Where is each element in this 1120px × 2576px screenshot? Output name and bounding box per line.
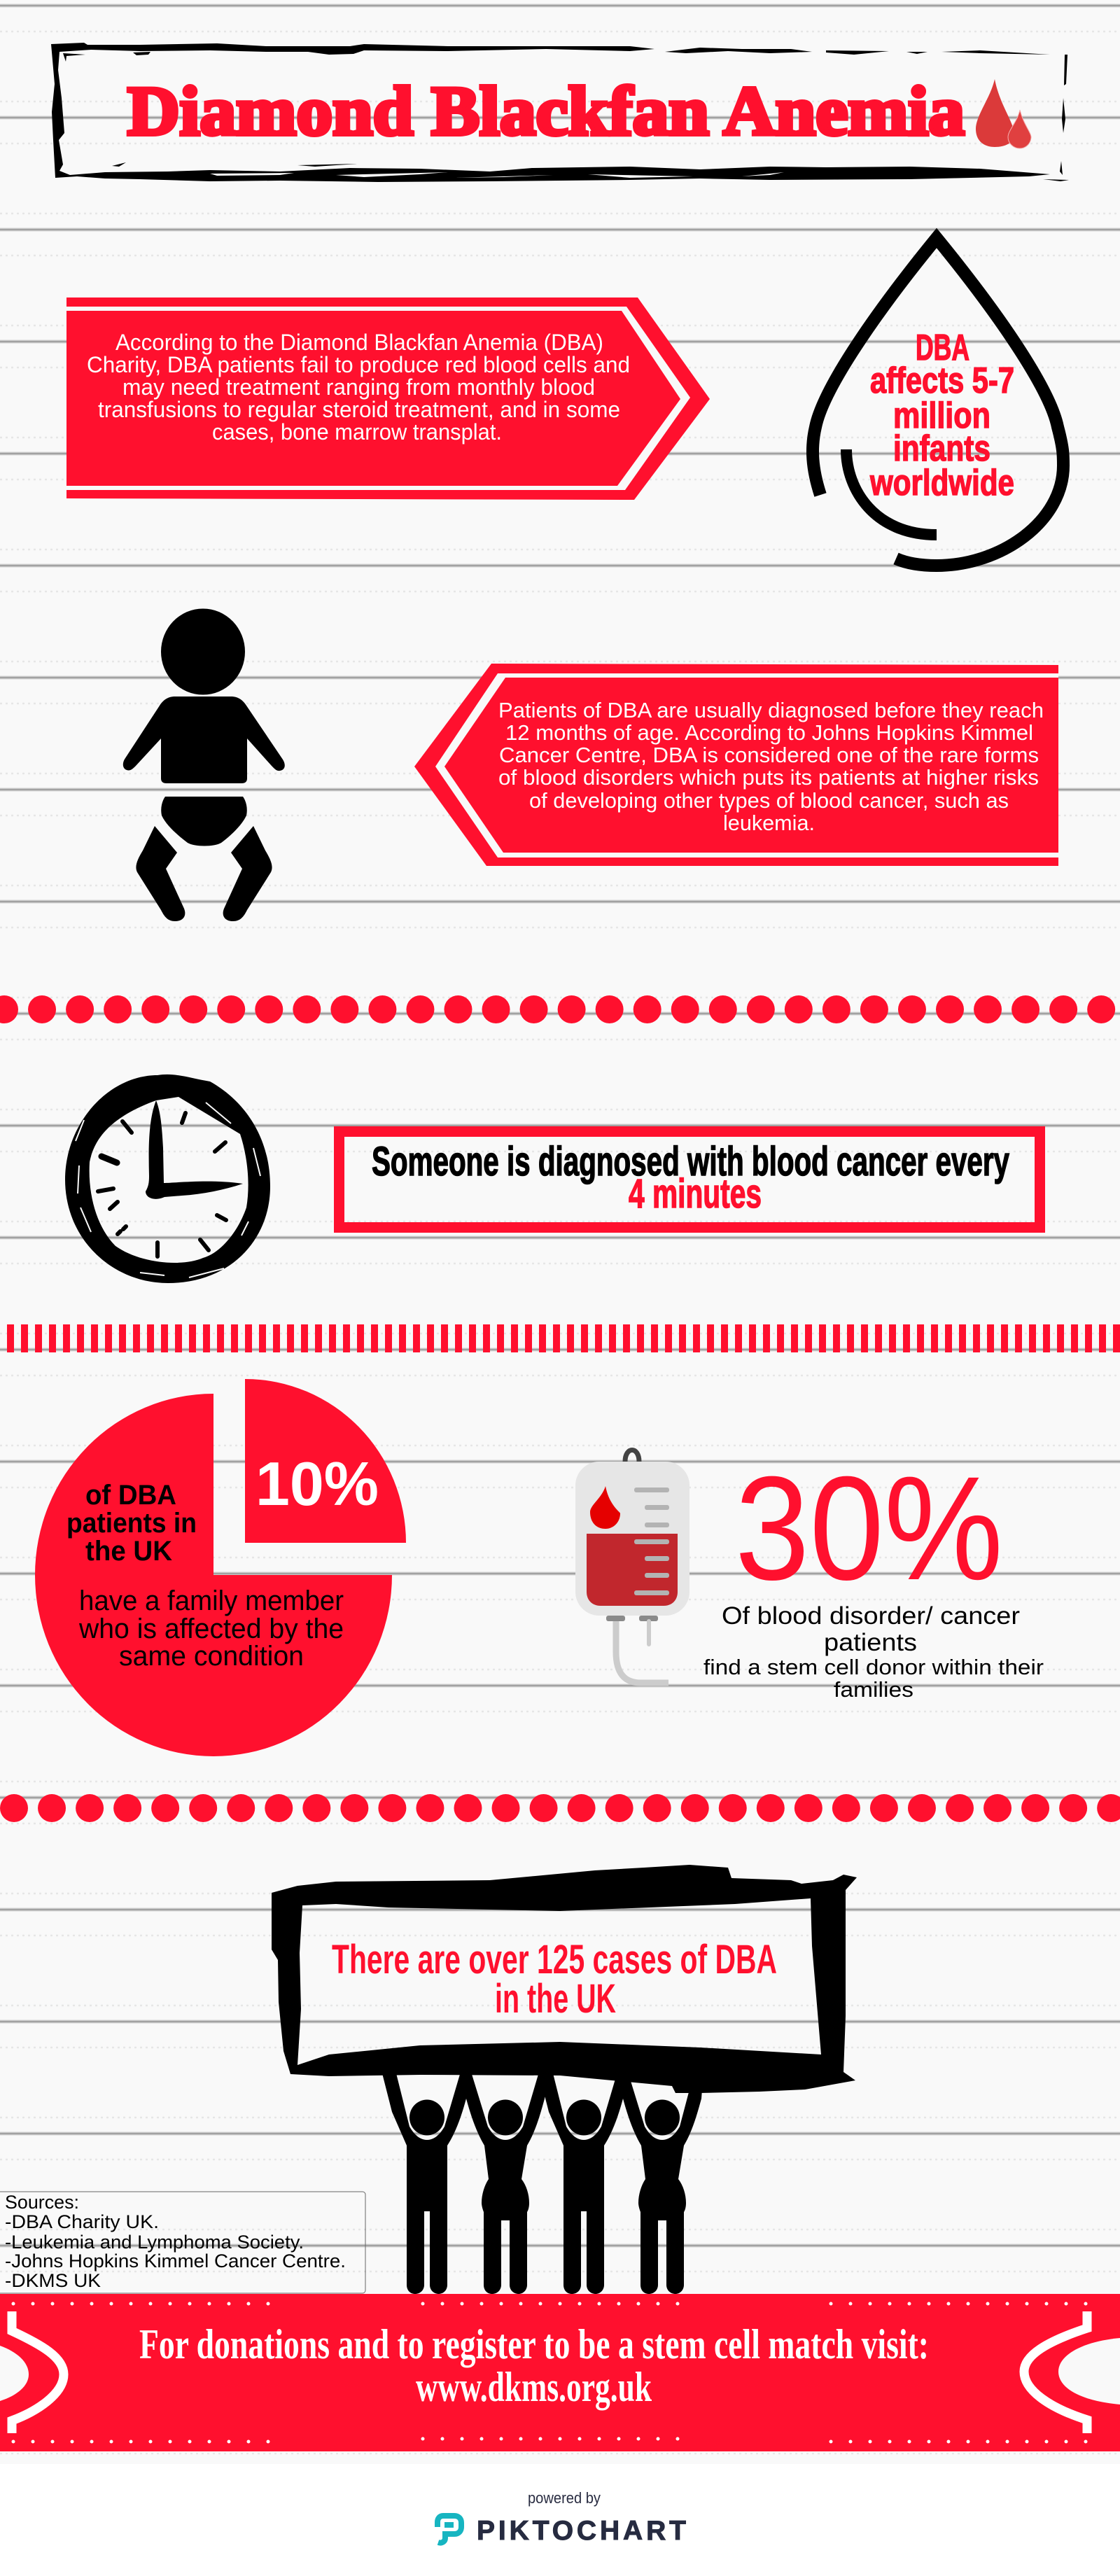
panel: diagnosis frequency: [339, 1131, 1040, 1228]
text: stem cell donor: families: [834, 1677, 913, 1702]
panel: sources: Sources:: [5, 2192, 79, 2213]
people silhouettes: [382, 2072, 702, 2294]
footer: piktochart wordmark: PIKTOCHART: [477, 2516, 686, 2546]
label: of DBA patients in the UK: [66, 1480, 197, 1567]
chart: 10% pie: [35, 1379, 406, 1756]
panel: drop statistic: [813, 238, 1063, 566]
diagnosis text: leukemia.: [723, 811, 815, 835]
intro text: Charity, DBA patients fail to produce red blood cells and: [87, 352, 630, 377]
divider: red dots: [14, 1794, 1120, 1822]
text: stem cell donor: Of blood disorder/ cancer: [722, 1602, 1020, 1630]
title text: Diamond Blackfan Anemia: [127, 72, 965, 150]
drop text: million: [893, 396, 990, 436]
text: stem cell donor: patients: [824, 1629, 917, 1656]
diagnosis text: of blood disorders which puts its patients at higher risks: [498, 765, 1039, 790]
panel: intro arrow: [66, 298, 710, 500]
frequency text: 4 minutes: [629, 1171, 762, 1217]
sign text: in the UK: [495, 1976, 616, 2022]
brush frame: [272, 1865, 857, 2093]
intro text: transfusions to regular steroid treatment, and in some: [98, 397, 620, 422]
banner stars: [13, 2304, 1089, 2442]
intro text: According to the Diamond Blackfan Anemia (DBA): [115, 330, 603, 355]
drop text: worldwide: [869, 463, 1014, 503]
panel: diagnosis arrow: [414, 664, 1058, 866]
illustration: people lifting sign: [272, 1865, 857, 2294]
stat: 30%: 30%: [735, 1446, 1003, 1611]
icon: piktochart logo: [438, 2516, 461, 2543]
sign text: There are over 125 cases of DBA: [332, 1937, 777, 1982]
divider: red dots: [4, 995, 1120, 1023]
panel: sources: -DBA Charity UK.: [5, 2211, 159, 2232]
icon: clock: [65, 1074, 270, 1283]
box border: [339, 1131, 1040, 1228]
drop text: infants: [893, 428, 990, 469]
drop text: [869, 328, 1014, 503]
icon: blood drops: [976, 79, 1031, 148]
label: 10%: 10%: [255, 1449, 379, 1518]
pie: 10% sector: [245, 1379, 406, 1543]
diagnosis text: Patients of DBA are usually diagnosed before they reach: [498, 698, 1044, 722]
intro text: [87, 330, 630, 444]
arrow shape: [66, 298, 710, 500]
panel: sources: -Leukemia and Lymphoma Society.: [5, 2232, 304, 2253]
pie: main sector: [35, 1394, 392, 1756]
icon: blood bag: [575, 1450, 690, 1683]
panel: sources: -Johns Hopkins Kimmel Cancer Centre.: [5, 2250, 346, 2272]
label: family member: [78, 1586, 344, 1672]
label: family member: who is affected by the: [78, 1614, 344, 1644]
divider: red stripes: [0, 1324, 1120, 1352]
diagnosis text: Cancer Centre, DBA is considered one of the rare forms: [499, 743, 1039, 767]
label: family member: same condition: [119, 1641, 304, 1672]
panel: sources: [0, 2192, 365, 2293]
label: of DBA patients in the UK: the UK: [85, 1536, 172, 1567]
panel: donation banner: [0, 2294, 1120, 2451]
left ornament: [0, 2311, 64, 2433]
banner text: www.dkms.org.uk: [416, 2364, 652, 2410]
panel: title banner: [51, 43, 1069, 182]
label: family member: have a family member: [79, 1586, 344, 1616]
frequency text: [372, 1139, 1009, 1217]
sign text: [332, 1937, 777, 2022]
label: of DBA patients in the UK: of DBA: [85, 1480, 176, 1511]
intro text: cases, bone marrow transplat.: [212, 419, 502, 444]
arrow shape: [414, 664, 1058, 866]
icon: baby: [123, 609, 285, 921]
text: stem cell donor: find a stem cell donor within their: [704, 1655, 1044, 1679]
right ornament: [1024, 2311, 1120, 2433]
text: stem cell donor: [704, 1602, 1044, 1702]
intro text: may need treatment ranging from monthly blood: [122, 374, 595, 400]
panel: sources: -DKMS UK: [5, 2270, 101, 2291]
icon: drop outline: [813, 238, 1063, 566]
label: of DBA patients in the UK: patients in: [66, 1508, 197, 1539]
footer: powered by: powered by: [528, 2489, 601, 2507]
diagnosis text: [498, 698, 1044, 835]
grunge frame: [51, 43, 1069, 182]
diagnosis text: of developing other types of blood cancer, such as: [529, 788, 1009, 813]
drop text: affects 5-7: [870, 360, 1014, 401]
drop text: DBA: [916, 328, 969, 368]
banner text: [139, 2321, 929, 2410]
diagnosis text: 12 months of age. According to Johns Hopkins Kimmel: [505, 720, 1033, 745]
